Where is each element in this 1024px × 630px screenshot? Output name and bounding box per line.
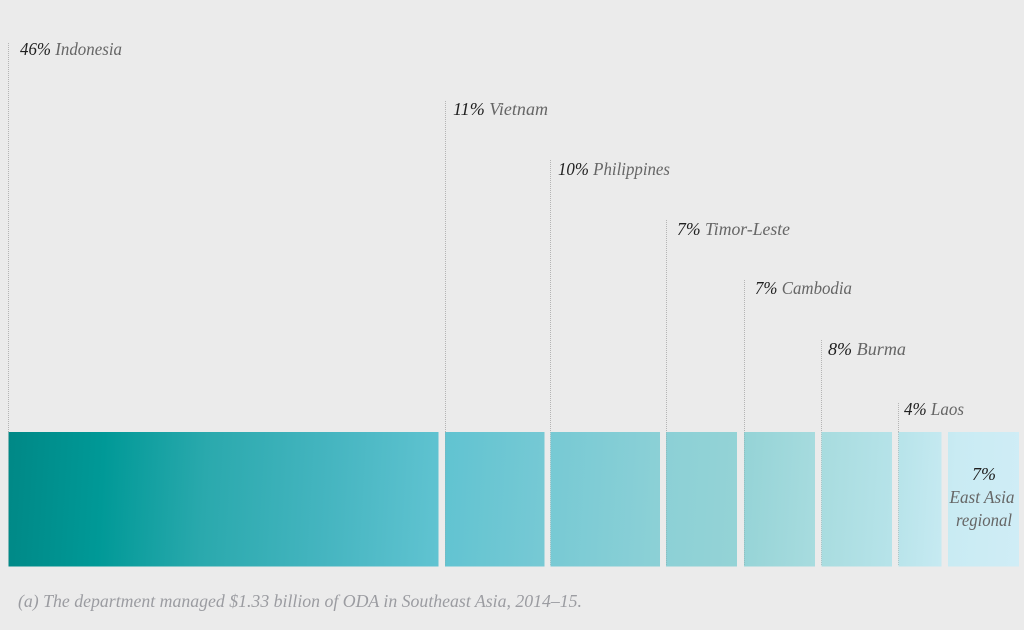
- segment: East Asia regional: [948, 432, 1019, 566]
- segment: Indonesia: [8, 39, 438, 566]
- segment: Laos: 4% Laos: [904, 399, 964, 419]
- segment: Philippines: [550, 159, 670, 566]
- segment: Indonesia: 46% Indonesia: [20, 39, 122, 59]
- segment: Burma: [822, 339, 906, 566]
- segment: Philippines: 10% Philippines: [558, 159, 670, 179]
- segment: East Asia regional: regional: [956, 510, 1012, 530]
- segment: Burma: 8% Burma: [828, 339, 906, 359]
- footnote: (a) The department managed $1.33 billion of ODA in Southeast Asia, 2014–15.: [18, 591, 582, 612]
- segment: Vietnam: [445, 99, 548, 566]
- segment: Timor-Leste: 7% Timor-Leste: [677, 219, 790, 239]
- segment: Cambodia: [744, 278, 852, 566]
- segment: Timor-Leste: [666, 219, 790, 566]
- segment: Cambodia: 7% Cambodia: [755, 278, 852, 298]
- segment: Vietnam: 11% Vietnam: [453, 99, 548, 119]
- segment: East Asia regional: East Asia: [949, 487, 1014, 507]
- segment: East Asia regional: 7%: [972, 464, 996, 484]
- segment: Laos: [898, 399, 964, 566]
